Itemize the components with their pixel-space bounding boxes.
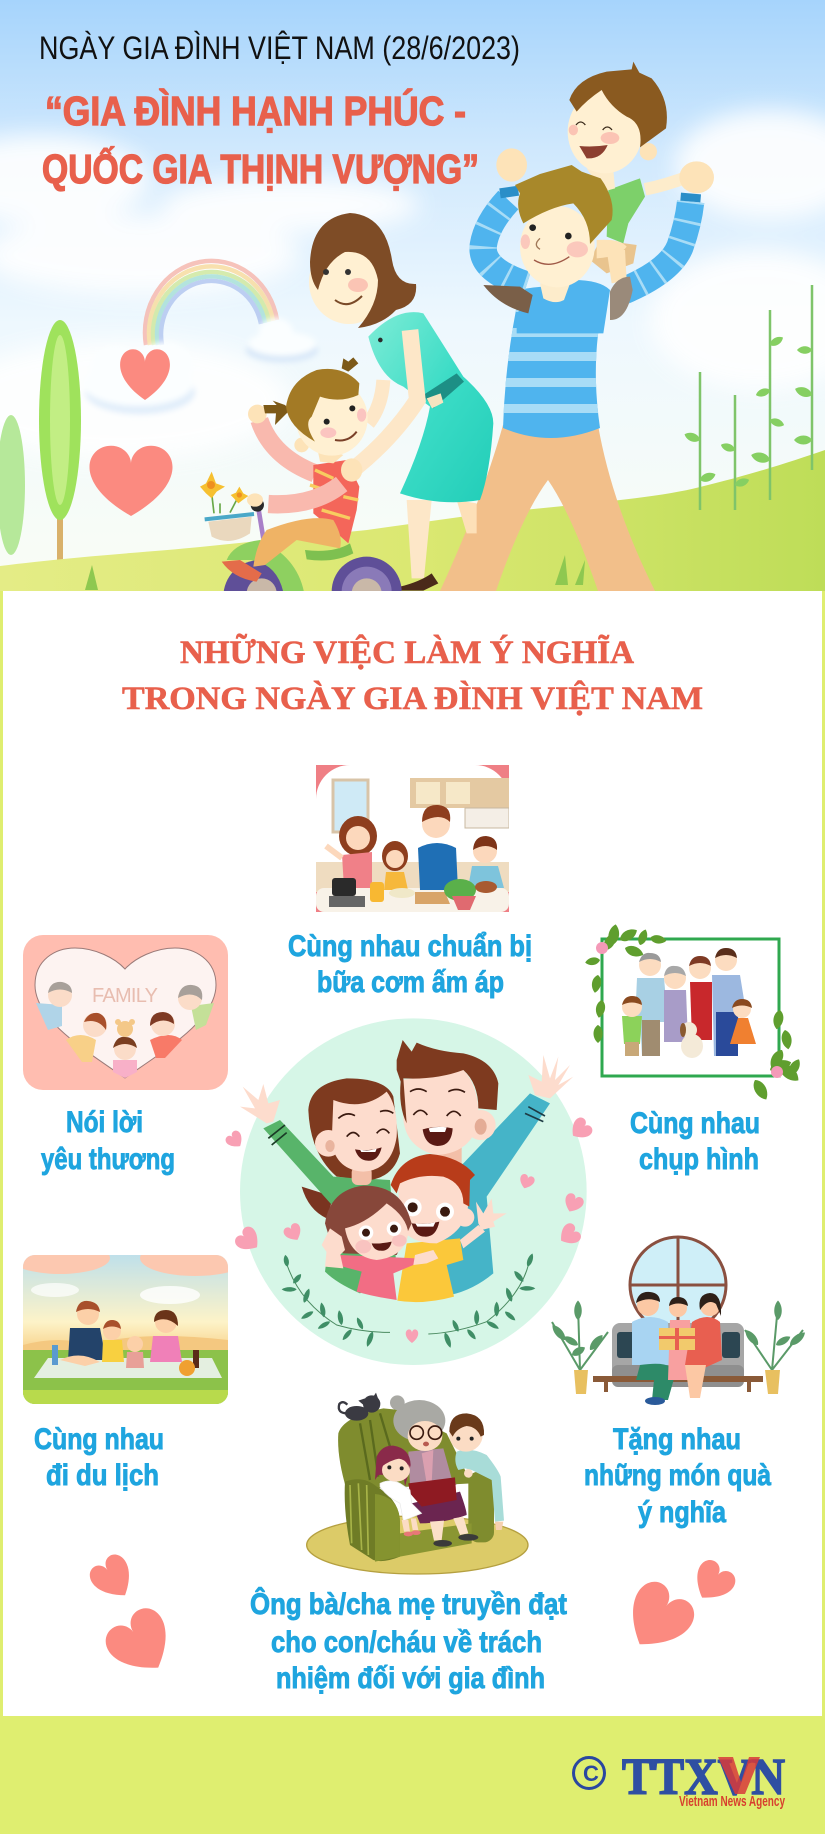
label: passing on family values <box>250 1587 567 1695</box>
father's raised arm <box>438 1055 573 1295</box>
small pink hearts <box>224 1115 595 1343</box>
slogan heading <box>42 88 479 192</box>
grass tufts <box>85 555 585 590</box>
logo: copyright mark and TTXVN <box>574 1749 785 1810</box>
picture: family photo in leafy frame <box>585 923 803 1102</box>
armchair <box>338 1408 494 1562</box>
slogan heading: QUỐC GIA THỊNH VƯỢNG” <box>42 146 479 192</box>
figure: mother's head <box>309 213 416 328</box>
sofa <box>593 1323 763 1392</box>
slogan heading: “GIA ĐÌNH HẠNH PHÚC - <box>45 88 466 134</box>
mother's near arm and hand <box>341 330 417 482</box>
cat <box>339 1393 380 1421</box>
tricycle <box>200 472 402 633</box>
girl <box>382 841 408 890</box>
label: travel <box>34 1423 164 1492</box>
picnic family <box>52 1301 199 1376</box>
label: cooking: Cùng nhau chuẩn bị <box>288 930 532 963</box>
gift box <box>659 1328 695 1350</box>
girl's upper arm <box>259 420 315 473</box>
boy's head <box>568 62 667 173</box>
label: passing on family values: Ông bà/cha mẹ truyền đạt <box>250 1587 567 1621</box>
father <box>418 805 458 890</box>
leaves of the frame <box>585 923 803 1102</box>
dog <box>680 1022 703 1058</box>
label: travel: đi du lịch <box>46 1459 159 1492</box>
mother's far arm <box>368 380 383 423</box>
figure: father's legs and torso <box>440 287 655 591</box>
label: gifts: ý nghĩa <box>638 1496 726 1529</box>
family members inside the heart <box>36 982 214 1078</box>
grandson <box>449 1413 504 1530</box>
book <box>408 1477 457 1507</box>
girl's lower arm <box>268 484 342 504</box>
girl <box>322 1186 438 1300</box>
right plants <box>683 285 814 510</box>
label: gifts <box>584 1423 771 1529</box>
label: cooking: bữa cơm ấm áp <box>317 966 504 999</box>
woman <box>685 1293 722 1398</box>
father's head <box>397 1040 498 1167</box>
man <box>632 1292 675 1405</box>
round window <box>630 1237 726 1333</box>
mother's dress <box>368 312 493 502</box>
boy <box>468 836 504 888</box>
mother <box>689 956 712 1040</box>
girl <box>668 1297 692 1380</box>
section heading: NHỮNG VIỆC LÀM Ý NGHĨA <box>180 633 634 671</box>
leaf wreath left <box>282 1254 390 1348</box>
girl's shirt <box>310 460 359 543</box>
label: taking photos: Cùng nhau <box>630 1107 760 1140</box>
label: loving words <box>41 1106 175 1176</box>
rug <box>307 1516 528 1574</box>
pot and stove <box>329 878 365 907</box>
girl's trousers and shoe <box>222 518 341 582</box>
boy's shirt and arms <box>496 148 714 243</box>
label: gifts: những món quà <box>584 1459 771 1492</box>
label: cooking <box>288 930 532 999</box>
section heading <box>122 633 703 717</box>
leaf wreath right <box>428 1253 535 1349</box>
grandmother <box>390 1395 478 1547</box>
decorative hearts <box>85 1550 740 1685</box>
label: gifts: Tặng nhau <box>613 1423 741 1456</box>
granddaughter <box>375 1446 422 1536</box>
title: NGÀY GIA ĐÌNH VIỆT NAM (28/6/2023) <box>39 30 520 66</box>
picture: giving gifts on sofa <box>550 1237 807 1405</box>
logo: copyright mark and TTXVN: C <box>583 1761 599 1786</box>
grandmother <box>664 966 688 1042</box>
trees <box>0 320 81 560</box>
picture: picnic <box>23 1255 228 1404</box>
label: travel: Cùng nhau <box>34 1423 164 1456</box>
mint circle <box>240 1018 587 1365</box>
central illustration: happy family <box>224 1018 595 1365</box>
father's head <box>515 165 627 302</box>
picture: grandmother reading to grandchildren <box>307 1393 528 1574</box>
boy <box>622 996 642 1056</box>
label: passing on family values: cho con/cháu về trách <box>271 1626 542 1659</box>
label: taking photos <box>630 1107 760 1176</box>
girl <box>730 999 756 1044</box>
pot left <box>574 1370 588 1394</box>
picture: family cooking together <box>316 765 509 912</box>
rainbow <box>145 261 277 345</box>
section heading: TRONG NGÀY GIA ĐÌNH VIỆT NAM <box>122 679 703 717</box>
plant right <box>743 1300 807 1370</box>
grandfather <box>635 953 668 1056</box>
logo: copyright mark and TTXVN: TTXVN <box>622 1749 785 1806</box>
boy's shoes <box>483 277 633 320</box>
pot right <box>765 1370 780 1394</box>
father's arms <box>483 191 701 292</box>
panel: hero illustration <box>0 0 825 633</box>
ground <box>0 450 825 591</box>
father <box>712 948 746 1056</box>
rainbow clouds <box>83 318 318 414</box>
clouds <box>0 110 825 460</box>
label: loving words: Nói lời <box>66 1106 143 1139</box>
boy's body <box>397 1198 507 1302</box>
figure: mother and girl on tricycle <box>200 312 493 633</box>
picture: heart family card: FAMILY <box>92 985 158 1007</box>
mother's legs <box>400 500 477 591</box>
father's shoulders <box>517 280 610 333</box>
label: taking photos: chụp hình <box>639 1143 759 1176</box>
picture: heart family card <box>23 935 228 1090</box>
mother's body and raised arm <box>240 1084 397 1293</box>
boy's shorts and leg <box>590 240 637 283</box>
figure: boy and father upper body <box>483 62 714 333</box>
hero hearts <box>89 349 173 516</box>
label: passing on family values: nhiệm đối với gia đình <box>276 1662 545 1695</box>
boy's head <box>391 1154 475 1243</box>
plant left <box>550 1300 608 1370</box>
panel: white content area <box>3 591 822 1716</box>
mother cooking <box>326 816 377 888</box>
label: loving words: yêu thương <box>41 1143 175 1176</box>
food on the counter <box>370 879 497 910</box>
girl's head <box>263 357 368 463</box>
mother's head <box>308 1078 400 1185</box>
